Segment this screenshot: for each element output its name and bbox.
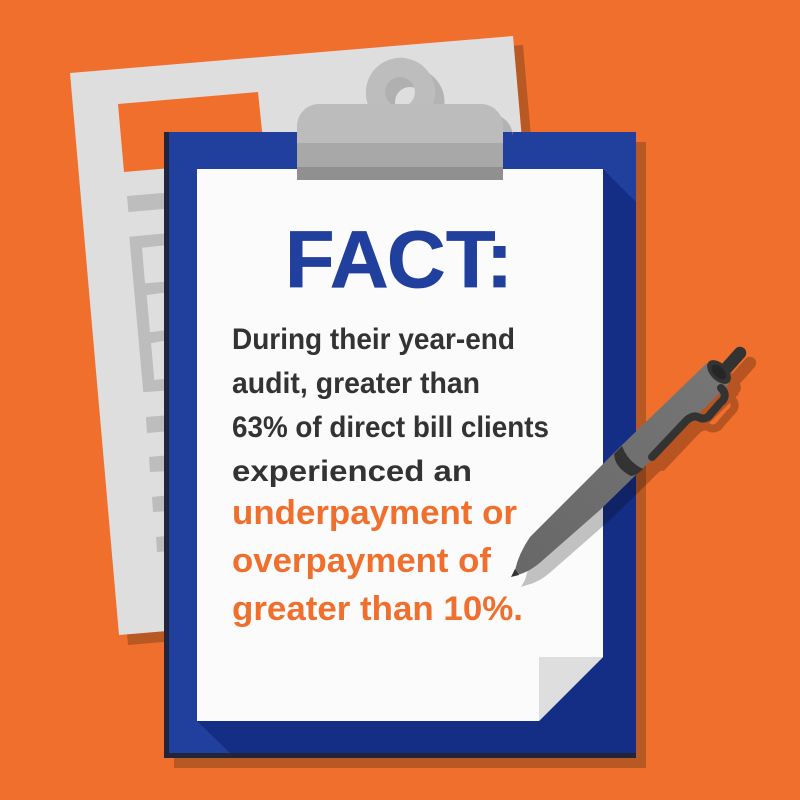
clip mid band xyxy=(297,143,503,167)
pen ring xyxy=(614,446,643,476)
pen cap xyxy=(703,356,735,388)
paper folded corner xyxy=(539,657,603,721)
clip ring xyxy=(366,58,435,127)
body text xyxy=(232,323,549,488)
back sheet orange header block xyxy=(118,92,265,172)
heading: FACT: FACT: xyxy=(285,215,513,305)
back sheet page xyxy=(70,36,562,635)
infographic canvas xyxy=(70,36,756,768)
pen plunger xyxy=(723,353,740,372)
clip bottom band xyxy=(297,167,503,180)
clip ring hole xyxy=(385,77,415,107)
clip ring shadow xyxy=(376,68,444,136)
highlight line 3: greater than 10%. xyxy=(232,590,523,628)
clip xyxy=(297,58,513,180)
clipboard board face xyxy=(169,132,636,753)
line 1: During their year-end xyxy=(232,323,515,356)
clipboard xyxy=(164,132,646,768)
pen cap inner xyxy=(709,362,729,382)
clipboard shaded area xyxy=(197,169,636,753)
pen shadow xyxy=(521,363,750,587)
clipboard board edge xyxy=(164,132,636,758)
clip top plate xyxy=(297,104,503,143)
clipboard shadow xyxy=(174,142,646,768)
paper top part xyxy=(197,169,603,721)
clip plate shadow xyxy=(490,114,513,137)
highlight line 2: overpayment of xyxy=(232,542,492,580)
highlight line 1: underpayment or xyxy=(232,494,517,532)
back sheet form lines xyxy=(127,192,171,552)
pen clip xyxy=(652,388,725,457)
back sheet shadow xyxy=(80,45,572,645)
clip ring opening xyxy=(395,87,415,104)
icon: pen xyxy=(511,353,750,587)
line 3: 63% of direct bill clients xyxy=(232,411,549,444)
line 4: experienced an xyxy=(232,455,472,488)
pen nib xyxy=(511,569,519,577)
front paper sheet xyxy=(197,169,603,721)
pen barrel xyxy=(515,363,729,575)
line 2: audit, greater than xyxy=(232,367,480,400)
back sheet of paper xyxy=(70,36,572,645)
highlighted text xyxy=(232,494,523,628)
